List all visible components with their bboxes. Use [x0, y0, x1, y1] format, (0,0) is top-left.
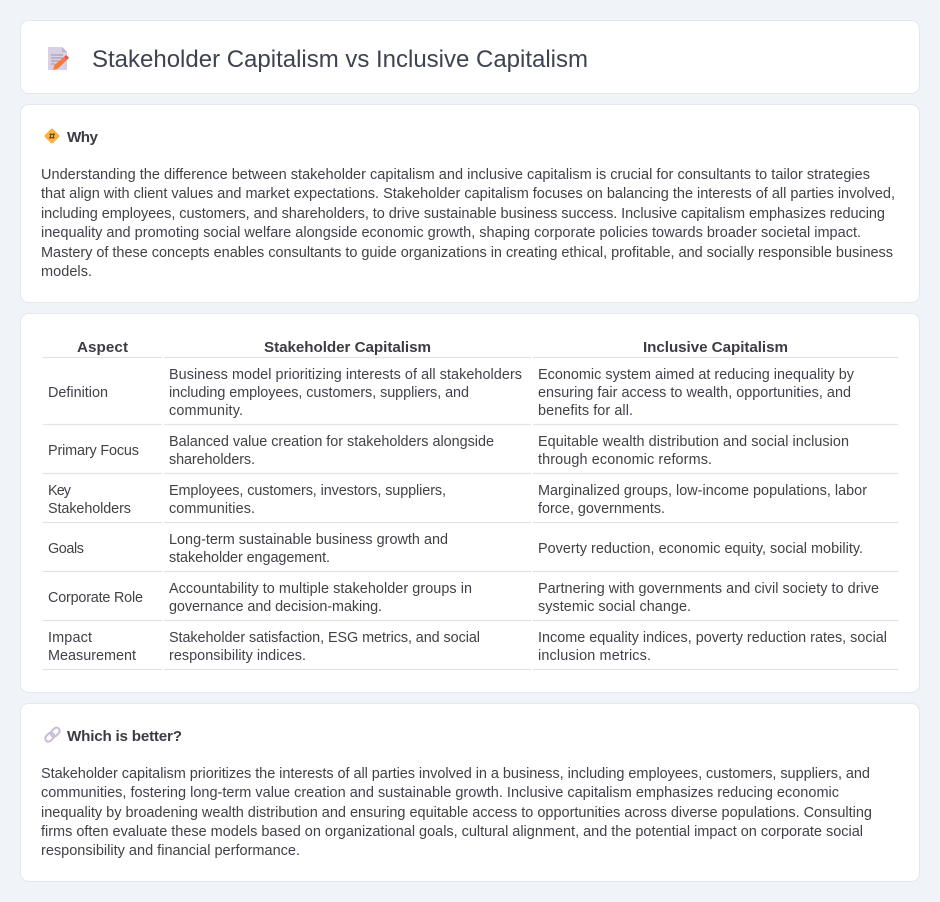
text block: which is better: firms often evaluate these models based on organizational goals, cultural alignment, and the potential impact on corporate social: [41, 824, 863, 840]
text block: which is better: [41, 766, 872, 859]
text block: which is better: Stakeholder capitalism prioritizes the interests of all parties involved in a business, including employees, customers, suppliers, and: [41, 766, 870, 782]
row: definition: benefits for all.: [538, 403, 633, 419]
row: definition: Business model prioritizing interests of all stakeholders: [169, 367, 522, 383]
row: primary focus: Equitable wealth distribution and social inclusion: [538, 434, 849, 450]
row: goals: [48, 532, 863, 566]
row: goals: Goals: [48, 541, 84, 557]
title: Stakeholder Capitalism vs Inclusive Capitalism: [92, 46, 588, 73]
row: primary focus: Balanced value creation for stakeholders alongside: [169, 434, 494, 450]
table header row: Stakeholder Capitalism: [264, 339, 431, 356]
heading: why: Why: [67, 129, 99, 146]
row: impact measurement: inclusion metrics.: [538, 648, 651, 664]
row: goals: Poverty reduction, economic equity, social mobility.: [538, 541, 863, 557]
row: primary focus: [48, 434, 849, 468]
row: key stakeholders: Marginalized groups, low-income populations, labor: [538, 483, 867, 499]
row: key stakeholders: [48, 483, 867, 517]
row: definition: Economic system aimed at reducing inequality by: [538, 367, 855, 383]
table header row: [77, 339, 788, 356]
panel: header: [20, 20, 920, 94]
table header row: Inclusive Capitalism: [643, 339, 788, 356]
row: corporate role: [48, 581, 879, 615]
text block: why: models.: [41, 264, 92, 280]
text block: which is better: communities, fostering long-term value creation and sustainable growth. Inclusive capitalism emphasizes reducing economic: [41, 785, 839, 801]
row: goals: stakeholder engagement.: [169, 550, 330, 566]
row: definition: Definition: [48, 385, 108, 401]
text block: why: [41, 167, 895, 280]
row: impact measurement: Stakeholder satisfaction, ESG metrics, and social: [169, 630, 480, 646]
text block: why: Mastery of these concepts enables consultants to guide organizations in creating ethical, profitable, and socially responsible business: [41, 245, 893, 261]
icon: warning diamond: [44, 128, 60, 144]
row: key stakeholders: Employees, customers, investors, suppliers,: [169, 483, 446, 499]
row: key stakeholders: Stakeholders: [48, 501, 131, 517]
row: definition: community.: [169, 403, 243, 419]
row: primary focus: shareholders.: [169, 452, 255, 468]
text block: why: that align with client values and market expectations. Stakeholder capitalism focuses on balancing the interests of all parties involved,: [41, 186, 895, 202]
row: key stakeholders: Key: [48, 483, 72, 499]
row: goals: Long-term sustainable business growth and: [169, 532, 448, 548]
row: key stakeholders: communities.: [169, 501, 255, 517]
panel: why: [20, 104, 920, 302]
row: definition: including employees, customers, suppliers, and: [169, 385, 469, 401]
row: impact measurement: Impact: [48, 630, 92, 646]
row: corporate role: Accountability to multiple stakeholder groups in: [169, 581, 472, 597]
row: impact measurement: [48, 630, 887, 664]
row: impact measurement: Measurement: [48, 648, 136, 664]
row: corporate role: Partnering with governments and civil society to drive: [538, 581, 879, 597]
row: corporate role: Corporate Role: [48, 590, 143, 606]
table header row: Aspect: [77, 339, 128, 356]
row: corporate role: governance and decision-making.: [169, 599, 382, 615]
row: definition: [48, 367, 855, 419]
text block: why: including employees, customers, and shareholders, to drive sustainable business success. Inclusive capitalism emphasizes reducing: [41, 206, 885, 222]
text block: why: inequality and promoting social welfare alongside economic growth, shaping corporate policies towards broader societal impact.: [41, 225, 861, 241]
text block: which is better: inequality by broadening wealth distribution and ensuring equitable access to opportunities across diverse populations. Consulting: [41, 805, 872, 821]
icon: document with pencil: [48, 47, 69, 70]
panel: comparison table: [20, 314, 920, 692]
row: primary focus: through economic reforms.: [538, 452, 712, 468]
row: corporate role: systemic social change.: [538, 599, 691, 615]
row: definition: ensuring fair access to wealth, opportunities, and: [538, 385, 851, 401]
row: key stakeholders: force, governments.: [538, 501, 665, 517]
heading: which is better: Which is better?: [67, 728, 182, 745]
text block: which is better: responsibility and financial performance.: [41, 843, 300, 859]
row: impact measurement: Income equality indices, poverty reduction rates, social: [538, 630, 887, 646]
icon: chain link: [44, 726, 61, 743]
row: primary focus: Primary Focus: [48, 443, 139, 459]
row: impact measurement: responsibility indices.: [169, 648, 306, 664]
text block: why: Understanding the difference between stakeholder capitalism and inclusive capitalism is crucial for consultants to tailor strategies: [41, 167, 870, 183]
panel: which is better: [20, 704, 920, 882]
